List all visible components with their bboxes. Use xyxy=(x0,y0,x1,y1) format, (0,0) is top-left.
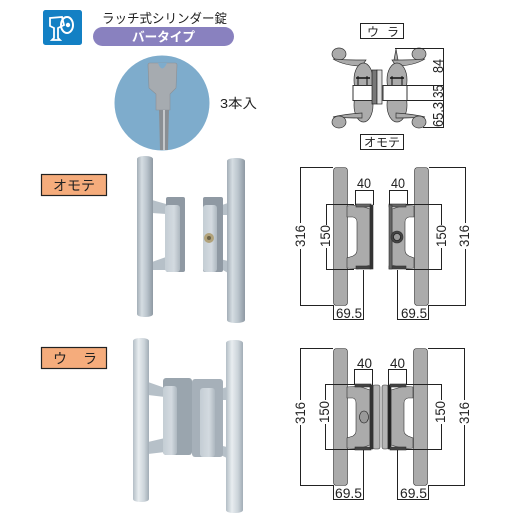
dimension values: 316 xyxy=(292,402,308,424)
technical section: door thickness view: 65.3 xyxy=(430,102,447,127)
label: front side: オモテ xyxy=(364,136,400,150)
label: back side: ウ xyxy=(367,25,379,39)
label: back side: ラ xyxy=(387,25,399,39)
photo: back handles xyxy=(133,338,243,513)
dimension values: 316 xyxy=(456,225,472,247)
label: back xyxy=(42,348,106,368)
dimension values: 40 xyxy=(357,175,371,191)
left drawing xyxy=(334,168,373,306)
door leaf section xyxy=(353,70,407,104)
dimension values: 316 xyxy=(456,402,472,424)
dimension lines xyxy=(300,348,465,500)
label: 3 keys included: 3本入 xyxy=(220,96,257,111)
technical section: door thickness view: 35 xyxy=(430,85,447,98)
left handle xyxy=(133,338,192,502)
drawing: front dimensions xyxy=(292,167,472,321)
dimension values: 69.5 xyxy=(336,305,362,321)
label: front: オモテ xyxy=(53,178,95,194)
right handle xyxy=(203,158,245,323)
left drawing xyxy=(334,348,380,486)
key photo in circle xyxy=(114,56,210,150)
dimension values: 40 xyxy=(391,175,405,191)
upper levers and bodies xyxy=(332,48,426,128)
dimension values: 316 xyxy=(292,225,308,247)
badge: bar type xyxy=(93,27,234,46)
dimension values: 150 xyxy=(432,401,448,423)
dimension values: 40 xyxy=(357,355,372,371)
dimension lines xyxy=(395,48,444,128)
dimension values: 40 xyxy=(390,355,405,371)
technical section: door thickness view xyxy=(332,24,447,150)
title: latch cylinder lock: ラッチ式シリンダー錠 xyxy=(102,11,227,26)
label: back: ウ xyxy=(53,350,67,366)
dimension values xyxy=(292,175,472,321)
dimension values: 69.5 xyxy=(335,485,362,501)
dimension values xyxy=(292,355,472,501)
dimension values: 84 xyxy=(430,59,447,73)
dimension values: 150 xyxy=(433,225,449,247)
dimension lines xyxy=(300,167,466,320)
label: front xyxy=(42,174,106,196)
dimension values: 69.5 xyxy=(401,305,427,321)
right drawing xyxy=(382,348,428,486)
dimension values: 150 xyxy=(316,401,332,423)
icon: key and cylinder xyxy=(43,10,82,45)
label: back side xyxy=(360,24,404,39)
photo: front handles xyxy=(137,156,245,323)
right handle xyxy=(192,340,243,513)
dimension values: 69.5 xyxy=(400,485,427,501)
drawing: back dimensions xyxy=(292,348,472,501)
label: back: ラ xyxy=(83,350,97,366)
right drawing xyxy=(389,168,428,306)
left handle xyxy=(137,156,185,317)
dimension values: 150 xyxy=(317,225,333,247)
badge: bar type: バータイプ xyxy=(132,30,195,44)
